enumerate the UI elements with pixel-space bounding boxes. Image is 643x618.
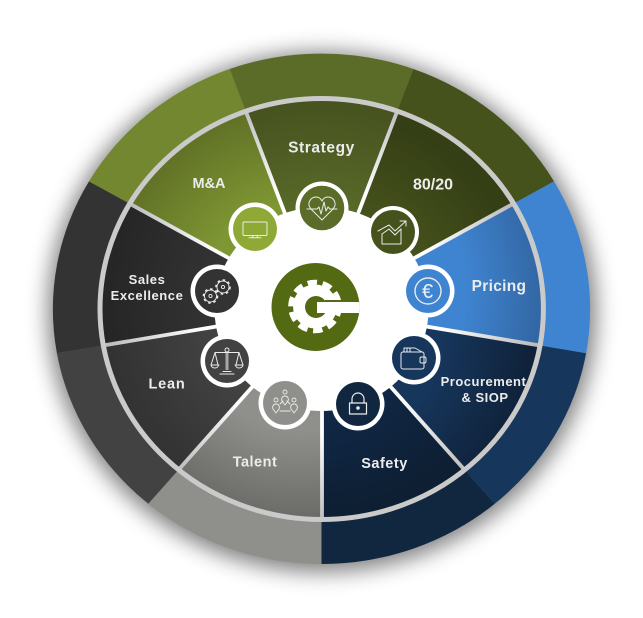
icon: euro (Pricing): € — [422, 281, 433, 303]
icon: scales (Lean) — [200, 334, 254, 388]
grey ring — [100, 98, 543, 520]
label: 80/20: 80/20 — [413, 176, 453, 194]
outer ring segments — [53, 54, 590, 564]
icon: monitor (M&A) — [228, 202, 282, 256]
label: Strategy: Strategy — [288, 140, 355, 156]
label: Sales Excellence: Excellence — [111, 288, 183, 303]
icon: people (Talent) — [258, 376, 312, 430]
logo — [272, 263, 362, 351]
inner segment: Procurement — [322, 309, 540, 470]
outer segment: Sales Excellence — [53, 181, 321, 353]
label: M&A: M&A — [192, 176, 226, 192]
inner segment: M&A — [130, 111, 322, 309]
label: Safety: Safety — [361, 456, 408, 472]
outer segment: Talent — [148, 309, 322, 564]
outer segment: Lean — [57, 309, 322, 504]
outer segment: Safety — [322, 309, 495, 564]
inner segment: Lean — [103, 309, 322, 470]
icon: gears (Sales Excellence) — [190, 264, 244, 318]
icon: heart pulse (Strategy) — [296, 182, 348, 234]
label: Sales Excellence: Sales — [129, 272, 165, 287]
inner segment: Sales Excellence — [100, 204, 322, 346]
inner segment: Strategy — [246, 98, 397, 309]
inner segment: Safety — [322, 309, 464, 520]
inner segments — [100, 98, 543, 520]
icon: growth chart (80/20) — [367, 206, 419, 258]
inner segment: Talent — [178, 309, 322, 520]
inner segment: 80/20 — [322, 111, 514, 309]
label: Lean: Lean — [148, 376, 186, 392]
drop shadow — [48, 52, 596, 572]
outer segment: Pricing — [322, 181, 590, 353]
outer segment: 80/20 — [322, 69, 554, 309]
label: Procurement & SIOP: & SIOP — [461, 390, 509, 405]
outer segment: M&A — [89, 69, 322, 309]
central white hub — [214, 207, 428, 411]
inner segment: Pricing — [322, 204, 543, 346]
label: Talent: Talent — [233, 454, 277, 470]
outer segment: Strategy — [230, 54, 413, 309]
outer segment: Procurement — [322, 309, 586, 504]
icon: wallet (Procurement) — [388, 332, 440, 384]
label: Procurement & SIOP: Procurement — [441, 374, 527, 389]
icon: padlock (Safety) — [332, 378, 384, 430]
label: Pricing: Pricing — [472, 278, 526, 295]
icon: euro (Pricing) — [402, 264, 454, 318]
